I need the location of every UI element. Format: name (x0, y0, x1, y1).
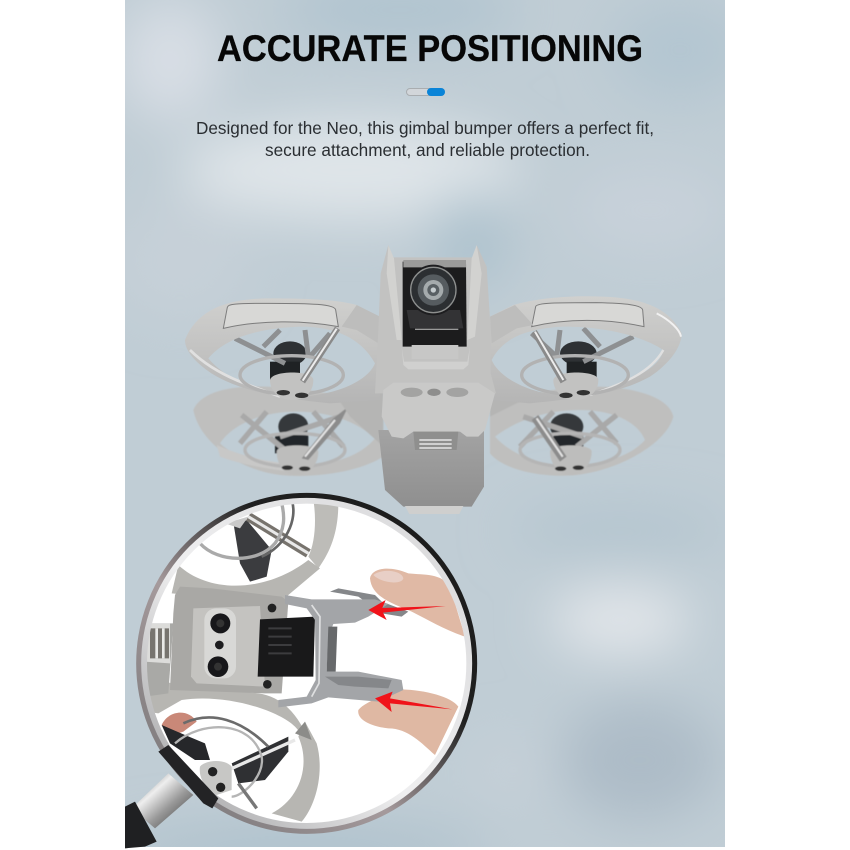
description text (196, 118, 654, 160)
magnifier inset (125, 495, 475, 848)
lens white background (146, 503, 467, 824)
red arrow: lower (375, 692, 452, 712)
lower propeller guards, out of focus (193, 386, 673, 476)
black connector block (258, 617, 315, 677)
toggle indicator (406, 88, 445, 96)
upper propeller and guard (200, 500, 338, 582)
camera housing (375, 245, 496, 393)
title: ACCURATE POSITIONING (217, 28, 643, 69)
lens contents (135, 500, 465, 822)
drone illustration (185, 245, 682, 514)
gimbal bumper being removed (278, 588, 408, 707)
drone body arm (172, 560, 320, 603)
lower arm block (337, 387, 523, 447)
description text: Designed for the Neo, this gimbal bumper offers a perfect fit, (196, 118, 654, 138)
upper finger (370, 569, 465, 637)
battery (378, 430, 484, 514)
lens rim (139, 495, 475, 831)
camera module (403, 260, 467, 347)
panel: cloudy sky background (110, 0, 750, 850)
lower finger (358, 689, 458, 755)
magnifier handle (125, 745, 218, 848)
bottom guard and propeller (162, 713, 320, 822)
lower left guard (193, 386, 383, 476)
bumper clip with vents (382, 383, 495, 450)
lower right guard (490, 387, 673, 476)
gimbal mount holes (204, 608, 236, 678)
red arrow: upper (368, 600, 446, 620)
description text: secure attachment, and reliable protection. (265, 140, 590, 160)
drone body (145, 587, 315, 697)
upper left propeller guard (185, 298, 380, 403)
upper right propeller guard (490, 296, 682, 403)
